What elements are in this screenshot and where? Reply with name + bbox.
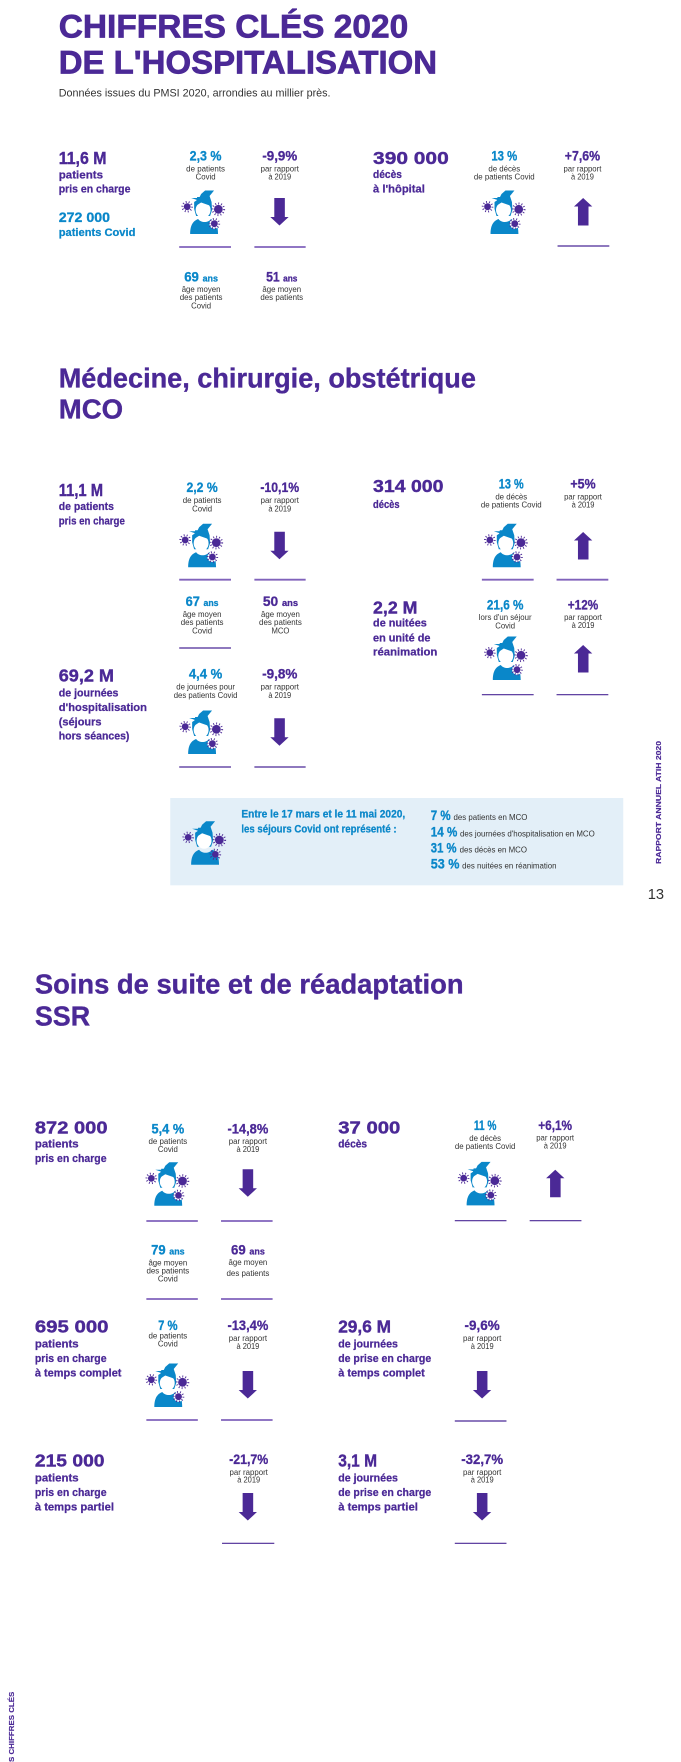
stat: 215 000 patients: patients <box>35 1473 79 1485</box>
stat: 872 000 patients <box>35 1117 108 1165</box>
divider line <box>557 579 608 581</box>
stat: 3,1 M journées: à temps partiel <box>338 1501 418 1513</box>
stat: 215 000 patients <box>35 1451 114 1513</box>
panel: MCO figures <box>59 475 608 767</box>
stat: -32,7 % <box>461 1451 504 1485</box>
stat: -14,8 %: à 2019 <box>236 1145 260 1154</box>
arrow: down <box>270 198 289 226</box>
stat: -21,7 %: à 2019 <box>237 1476 261 1485</box>
icon: patient with virus <box>180 524 222 567</box>
stat: 13 % Covid <box>474 148 535 182</box>
stat: 11,1 M patients <box>59 480 125 528</box>
panel: callout Covid <box>170 798 623 885</box>
stat: 69 ans: âge moyen <box>228 1258 268 1267</box>
stat: 69 ans: âge moyen <box>182 285 221 294</box>
icon: patient with virus <box>147 1364 188 1407</box>
stat: 390 000 décès <box>373 148 449 196</box>
stat: -13,4 %: -13,4% <box>227 1317 269 1333</box>
callout figures <box>431 807 595 871</box>
icon: patient with virus <box>485 636 527 680</box>
stat: -9,6 %: -9,6% <box>465 1317 500 1333</box>
stat: 11,6 M patients: 11,6 M <box>59 148 107 168</box>
stat: 2,3 % Covid: Covid <box>196 173 216 182</box>
stat: 50 ans: MCO <box>272 626 290 635</box>
heading: SSR <box>35 968 464 1032</box>
stat: -9,8 %: à 2019 <box>268 691 292 700</box>
stat: 37 000 décès <box>338 1117 400 1151</box>
stat: -9,8 %: -9,8% <box>262 666 298 682</box>
stat: +7,6 %: +7,6% <box>565 148 601 164</box>
divider line <box>179 579 231 581</box>
stat: 13 % Covid <box>481 475 542 510</box>
stat: -9,9 %: -9,9% <box>262 148 298 164</box>
stat: 29,6 M journées: 29,6 M <box>338 1317 391 1337</box>
stat: -10,1 % <box>260 479 300 513</box>
panel: SSR figures <box>35 1117 581 1543</box>
stat: 3,1 M journées: de prise en charge <box>338 1487 431 1499</box>
title: CHIFFRES CLÉS 2020 <box>59 7 408 44</box>
stat: 69 ans: 69 ans <box>231 1241 265 1257</box>
arrow: down <box>239 1169 257 1197</box>
stat: 4,4 % Covid <box>174 666 238 700</box>
stat: 69 ans: des patients <box>227 1269 269 1278</box>
stat: -9,6 % <box>463 1317 502 1351</box>
arrow: down <box>473 1371 491 1398</box>
stat: 67 ans: âge moyen <box>183 610 222 619</box>
stat: 21,6 % Covid: 21,6 % <box>487 596 524 612</box>
stat: 50 ans <box>259 593 302 635</box>
stat: 7 % Covid: 7 % <box>158 1317 178 1333</box>
stat: 69 ans <box>227 1241 269 1278</box>
divider line <box>455 1542 506 1544</box>
heading: SSR: SSR <box>35 1001 90 1032</box>
divider line <box>254 246 306 248</box>
stat: 7 % Covid <box>148 1317 187 1349</box>
callout heading: Entre le 17 mars et le 11 mai 2020, <box>241 809 405 821</box>
divider line <box>482 579 534 581</box>
stat: 2,2 M nuitées: 2,2 M <box>373 597 417 617</box>
stat: 51 ans: 51 ans <box>266 268 297 284</box>
stat: +5 %: par rapport <box>564 492 603 501</box>
stat: -21,7 % <box>229 1451 269 1485</box>
stat: 69,2 M journées: d'hospitalisation <box>59 702 147 714</box>
callout figures: des journées d'hospitalisation en MCO <box>460 829 595 838</box>
stat: -32,7 %: par rapport <box>463 1468 502 1477</box>
stat: 2,2 % Covid: Covid <box>192 504 212 513</box>
stat: 695 000 patients: pris en charge <box>35 1353 107 1365</box>
arrow: up <box>574 532 592 560</box>
divider line <box>221 1298 273 1300</box>
stat: 872 000 patients: 872 000 <box>35 1117 108 1137</box>
stat: 2,2 M nuitées: en unité de <box>373 632 430 644</box>
callout background <box>170 798 623 885</box>
callout figures: 7 % <box>431 807 451 823</box>
stat: 11 % Covid: de décès <box>469 1134 501 1143</box>
stat: 51 ans: âge moyen <box>262 285 302 294</box>
stat: +6,1 %: par rapport <box>536 1134 575 1143</box>
stat: +6,1 %: +6,1% <box>538 1117 573 1133</box>
callout heading <box>241 809 405 835</box>
stat: 314 000 décès: 314 000 <box>373 476 443 496</box>
stat: +5 %: +5% <box>570 475 596 491</box>
stat: 51 ans: des patients <box>260 293 303 302</box>
stat: 79 ans: âge moyen <box>148 1258 188 1267</box>
stat: 21,6 % Covid <box>479 596 532 630</box>
stat: 4,4 % Covid: 4,4 % <box>189 666 223 682</box>
divider line <box>222 1542 274 1544</box>
stat: 13 % Covid: 13 % <box>499 475 524 491</box>
stat: 2,2 M nuitées <box>373 597 438 659</box>
stat: -9,6 %: à 2019 <box>471 1342 494 1351</box>
stat: 2,3 % Covid <box>186 148 225 182</box>
stat: 3,1 M journées: 3,1 M <box>338 1451 377 1471</box>
stat: 390 000 décès: 390 000 <box>373 148 449 168</box>
stat: 13 % Covid: de décès <box>495 492 527 501</box>
heading: MCO: MCO <box>59 393 123 424</box>
icon: patient with virus <box>485 524 527 567</box>
stat: 2,2 % Covid: de patients <box>183 496 222 505</box>
divider line <box>455 1220 506 1222</box>
arrow: down <box>473 1493 491 1520</box>
stat: 67 ans <box>181 593 224 635</box>
stat: -14,8 %: par rapport <box>229 1137 268 1146</box>
stat: -32,7 %: -32,7% <box>461 1451 504 1467</box>
divider line <box>146 1220 198 1222</box>
stat: 37 000 décès: décès <box>338 1139 367 1151</box>
divider line <box>254 766 306 768</box>
stat: 50 ans: des patients <box>259 618 302 627</box>
panel: ensemble des hospitalisations <box>59 148 609 310</box>
stat: 13 % Covid: de décès <box>488 164 520 173</box>
stat: 872 000 patients: patients <box>35 1139 79 1151</box>
stat: -10,1 %: à 2019 <box>268 504 292 513</box>
stat: 2,3 % Covid: de patients <box>186 164 225 173</box>
stat: 2,3 % Covid: 2,3 % <box>190 148 222 164</box>
stat: 13 % Covid: de patients Covid <box>481 501 542 510</box>
arrow: up <box>574 645 592 672</box>
callout figures: 53 % <box>431 855 460 871</box>
stat: +5 %: à 2019 <box>572 500 595 509</box>
divider line <box>179 766 231 768</box>
heading: SSR: Soins de suite et de réadaptation <box>35 968 464 999</box>
divider line <box>146 1298 198 1300</box>
arrow: up <box>546 1170 564 1197</box>
stat: 79 ans: Covid <box>158 1275 178 1284</box>
stat: -9,9 %: à 2019 <box>268 173 292 182</box>
stat: 695 000 patients: à temps complet <box>35 1367 122 1379</box>
stat: 29,6 M journées: de journées <box>338 1339 398 1351</box>
stat: 79 ans: 79 ans <box>151 1241 185 1257</box>
stat: 390 000 décès: à l'hôpital <box>373 184 425 196</box>
stat: 69 ans: Covid <box>191 301 211 310</box>
stat: -13,4 %: par rapport <box>229 1334 268 1343</box>
stat: -32,7 %: à 2019 <box>471 1476 494 1485</box>
stat: -9,8 %: par rapport <box>261 683 300 692</box>
stat: 69 ans: des patients <box>180 293 223 302</box>
stat: 69 ans <box>180 268 223 310</box>
stat: 7 % Covid: Covid <box>158 1340 178 1349</box>
side label: rapport annuel: RAPPORT ANNUEL ATIH 2020 <box>654 741 663 864</box>
heading: MCO <box>59 363 476 424</box>
page number: 13 <box>648 886 664 903</box>
stat: -9,6 %: par rapport <box>463 1334 502 1343</box>
stat: 79 ans: des patients <box>146 1266 189 1275</box>
stat: 695 000 patients: patients <box>35 1339 79 1351</box>
divider line <box>455 1420 506 1422</box>
stat: 215 000 patients: pris en charge <box>35 1487 107 1499</box>
stat: 3,1 M journées: de journées <box>338 1473 398 1485</box>
stat: +5 % <box>564 475 603 509</box>
stat: +6,1 % <box>536 1117 575 1151</box>
stat: 21,6 % Covid: Covid <box>495 621 516 630</box>
divider line <box>254 579 306 581</box>
stat: 51 ans <box>260 268 303 302</box>
stat: 69,2 M journées: de journées <box>59 688 118 700</box>
divider line <box>179 647 231 649</box>
stat: +7,6 % <box>564 148 602 182</box>
arrow: down <box>239 1493 257 1520</box>
stat: +12 %: +12% <box>568 596 599 612</box>
stat: 13 % Covid: 13 % <box>491 148 518 164</box>
stat: 11,6 M patients: patients <box>59 169 103 181</box>
stat: 50 ans: âge moyen <box>261 610 300 619</box>
stat: 4,4 % Covid: de journées pour <box>176 683 235 692</box>
subtitle: Données issues du PMSI 2020, arrondies au millier près. <box>59 88 331 100</box>
stat: +7,6 %: à 2019 <box>571 173 594 182</box>
arrow: down <box>270 718 289 746</box>
stat: 314 000 décès <box>373 476 443 511</box>
stat: 7 % Covid: de patients <box>148 1331 187 1340</box>
stat: +7,6 %: par rapport <box>564 164 602 173</box>
side label: chiffres clés: S CHIFFRES CLÉS <box>7 1692 16 1762</box>
divider line <box>482 694 534 696</box>
divider line <box>179 246 231 248</box>
stat: +12 % <box>564 596 603 630</box>
stat: -10,1 %: -10,1% <box>260 479 300 495</box>
stat: +12 %: à 2019 <box>572 621 595 630</box>
icon: patient with virus <box>459 1162 501 1205</box>
callout figures: 14 % <box>431 823 458 839</box>
divider line <box>221 1419 273 1421</box>
stat: -14,8 %: -14,8% <box>227 1120 269 1136</box>
heading: MCO: Médecine, chirurgie, obstétrique <box>59 363 476 394</box>
stat: 695 000 patients <box>35 1317 122 1379</box>
stat: 390 000 décès: décès <box>373 169 402 181</box>
stat: 2,2 M nuitées: de nuitées <box>373 618 427 630</box>
stat: -10,1 %: par rapport <box>261 496 300 505</box>
stat: 67 ans: 67 ans <box>186 593 219 609</box>
icon: patient with virus <box>183 821 225 865</box>
callout figures: des nuitées en réanimation <box>462 861 557 870</box>
callout figures: des décès en MCO <box>460 845 528 854</box>
stat: -9,9 % <box>261 148 300 182</box>
stat: 215 000 patients: à temps partiel <box>35 1501 114 1513</box>
callout figures: des patients en MCO <box>454 813 528 822</box>
stat: 3,1 M journées <box>338 1451 431 1513</box>
stat: -9,8 % <box>261 666 300 700</box>
divider line <box>221 1220 273 1222</box>
stat: 215 000 patients: 215 000 <box>35 1451 105 1471</box>
stat: 2,2 M nuitées: réanimation <box>373 647 438 659</box>
stat: 69,2 M journées: 69,2 M <box>59 666 114 686</box>
stat: +6,1 %: à 2019 <box>544 1142 567 1151</box>
stat: -21,7 %: -21,7% <box>229 1451 269 1467</box>
stat: -13,4 %: à 2019 <box>236 1342 260 1351</box>
icon: patient with virus <box>147 1162 188 1206</box>
stat: 5,4 % Covid: Covid <box>158 1145 178 1154</box>
icon: patient with virus <box>182 190 224 234</box>
callout heading: les séjours Covid ont représenté : <box>241 823 397 835</box>
stat: 11,1 M patients: de patients <box>59 501 114 513</box>
divider line <box>557 694 608 696</box>
stat: 314 000 décès: décès <box>373 499 400 511</box>
stat: 5,4 % Covid: de patients <box>148 1137 187 1146</box>
icon: patient with virus <box>483 190 525 234</box>
stat: 272 000 patients Covid <box>59 209 135 239</box>
divider line <box>558 245 609 247</box>
stat: -14,8 % <box>227 1120 269 1154</box>
stat: 67 ans: Covid <box>192 626 212 635</box>
stat: 2,2 % Covid <box>183 479 222 513</box>
stat: 11,1 M patients: pris en charge <box>59 516 125 528</box>
stat: 69,2 M journées: hors séances) <box>59 731 130 743</box>
stat: -13,4 % <box>227 1317 269 1351</box>
stat: 21,6 % Covid: lors d'un séjour <box>479 613 532 622</box>
stat: 50 ans: 50 ans <box>263 593 298 609</box>
stat: 272 000 patients Covid: patients Covid <box>59 227 135 239</box>
arrow: down <box>239 1371 257 1398</box>
stat: 29,6 M journées: de prise en charge <box>338 1353 431 1365</box>
stat: -21,7 %: par rapport <box>230 1468 269 1477</box>
icon: patient with virus <box>180 710 222 754</box>
stat: 5,4 % Covid <box>148 1120 187 1154</box>
stat: 69 ans: 69 ans <box>184 268 218 284</box>
arrow: up <box>574 198 592 226</box>
arrow: down <box>270 532 289 559</box>
stat: 13 % Covid: de patients Covid <box>474 173 535 182</box>
stat: 872 000 patients: pris en charge <box>35 1153 107 1165</box>
stat: 11,6 M patients <box>59 148 130 196</box>
stat: 11 % Covid <box>455 1117 516 1151</box>
stat: 37 000 décès: 37 000 <box>338 1117 400 1137</box>
stat: -9,9 %: par rapport <box>261 164 300 173</box>
stat: 11,1 M patients: 11,1 M <box>59 480 103 500</box>
stat: 11 % Covid: 11 % <box>474 1117 497 1133</box>
stat: 29,6 M journées <box>338 1317 431 1379</box>
stat: 695 000 patients: 695 000 <box>35 1317 109 1337</box>
stat: 69,2 M journées: (séjours <box>59 716 102 728</box>
stat: 272 000 patients Covid: 272 000 <box>59 209 110 225</box>
stat: 11 % Covid: de patients Covid <box>455 1142 516 1151</box>
stat: 2,2 % Covid: 2,2 % <box>186 479 218 495</box>
stat: 4,4 % Covid: des patients Covid <box>174 691 238 700</box>
stat: 69,2 M journées <box>59 666 147 743</box>
stat: 29,6 M journées: à temps complet <box>338 1367 425 1379</box>
stat: +12 %: par rapport <box>564 613 603 622</box>
stat: 67 ans: des patients <box>181 618 224 627</box>
title: DE L'HOSPITALISATION <box>59 45 437 81</box>
divider line <box>530 1220 581 1222</box>
title <box>59 7 437 81</box>
divider line <box>146 1419 198 1421</box>
stat: 79 ans <box>146 1241 189 1284</box>
stat: 11,6 M patients: pris en charge <box>59 184 130 196</box>
stat: 5,4 % Covid: 5,4 % <box>152 1120 185 1136</box>
callout figures: 31 % <box>431 839 457 855</box>
